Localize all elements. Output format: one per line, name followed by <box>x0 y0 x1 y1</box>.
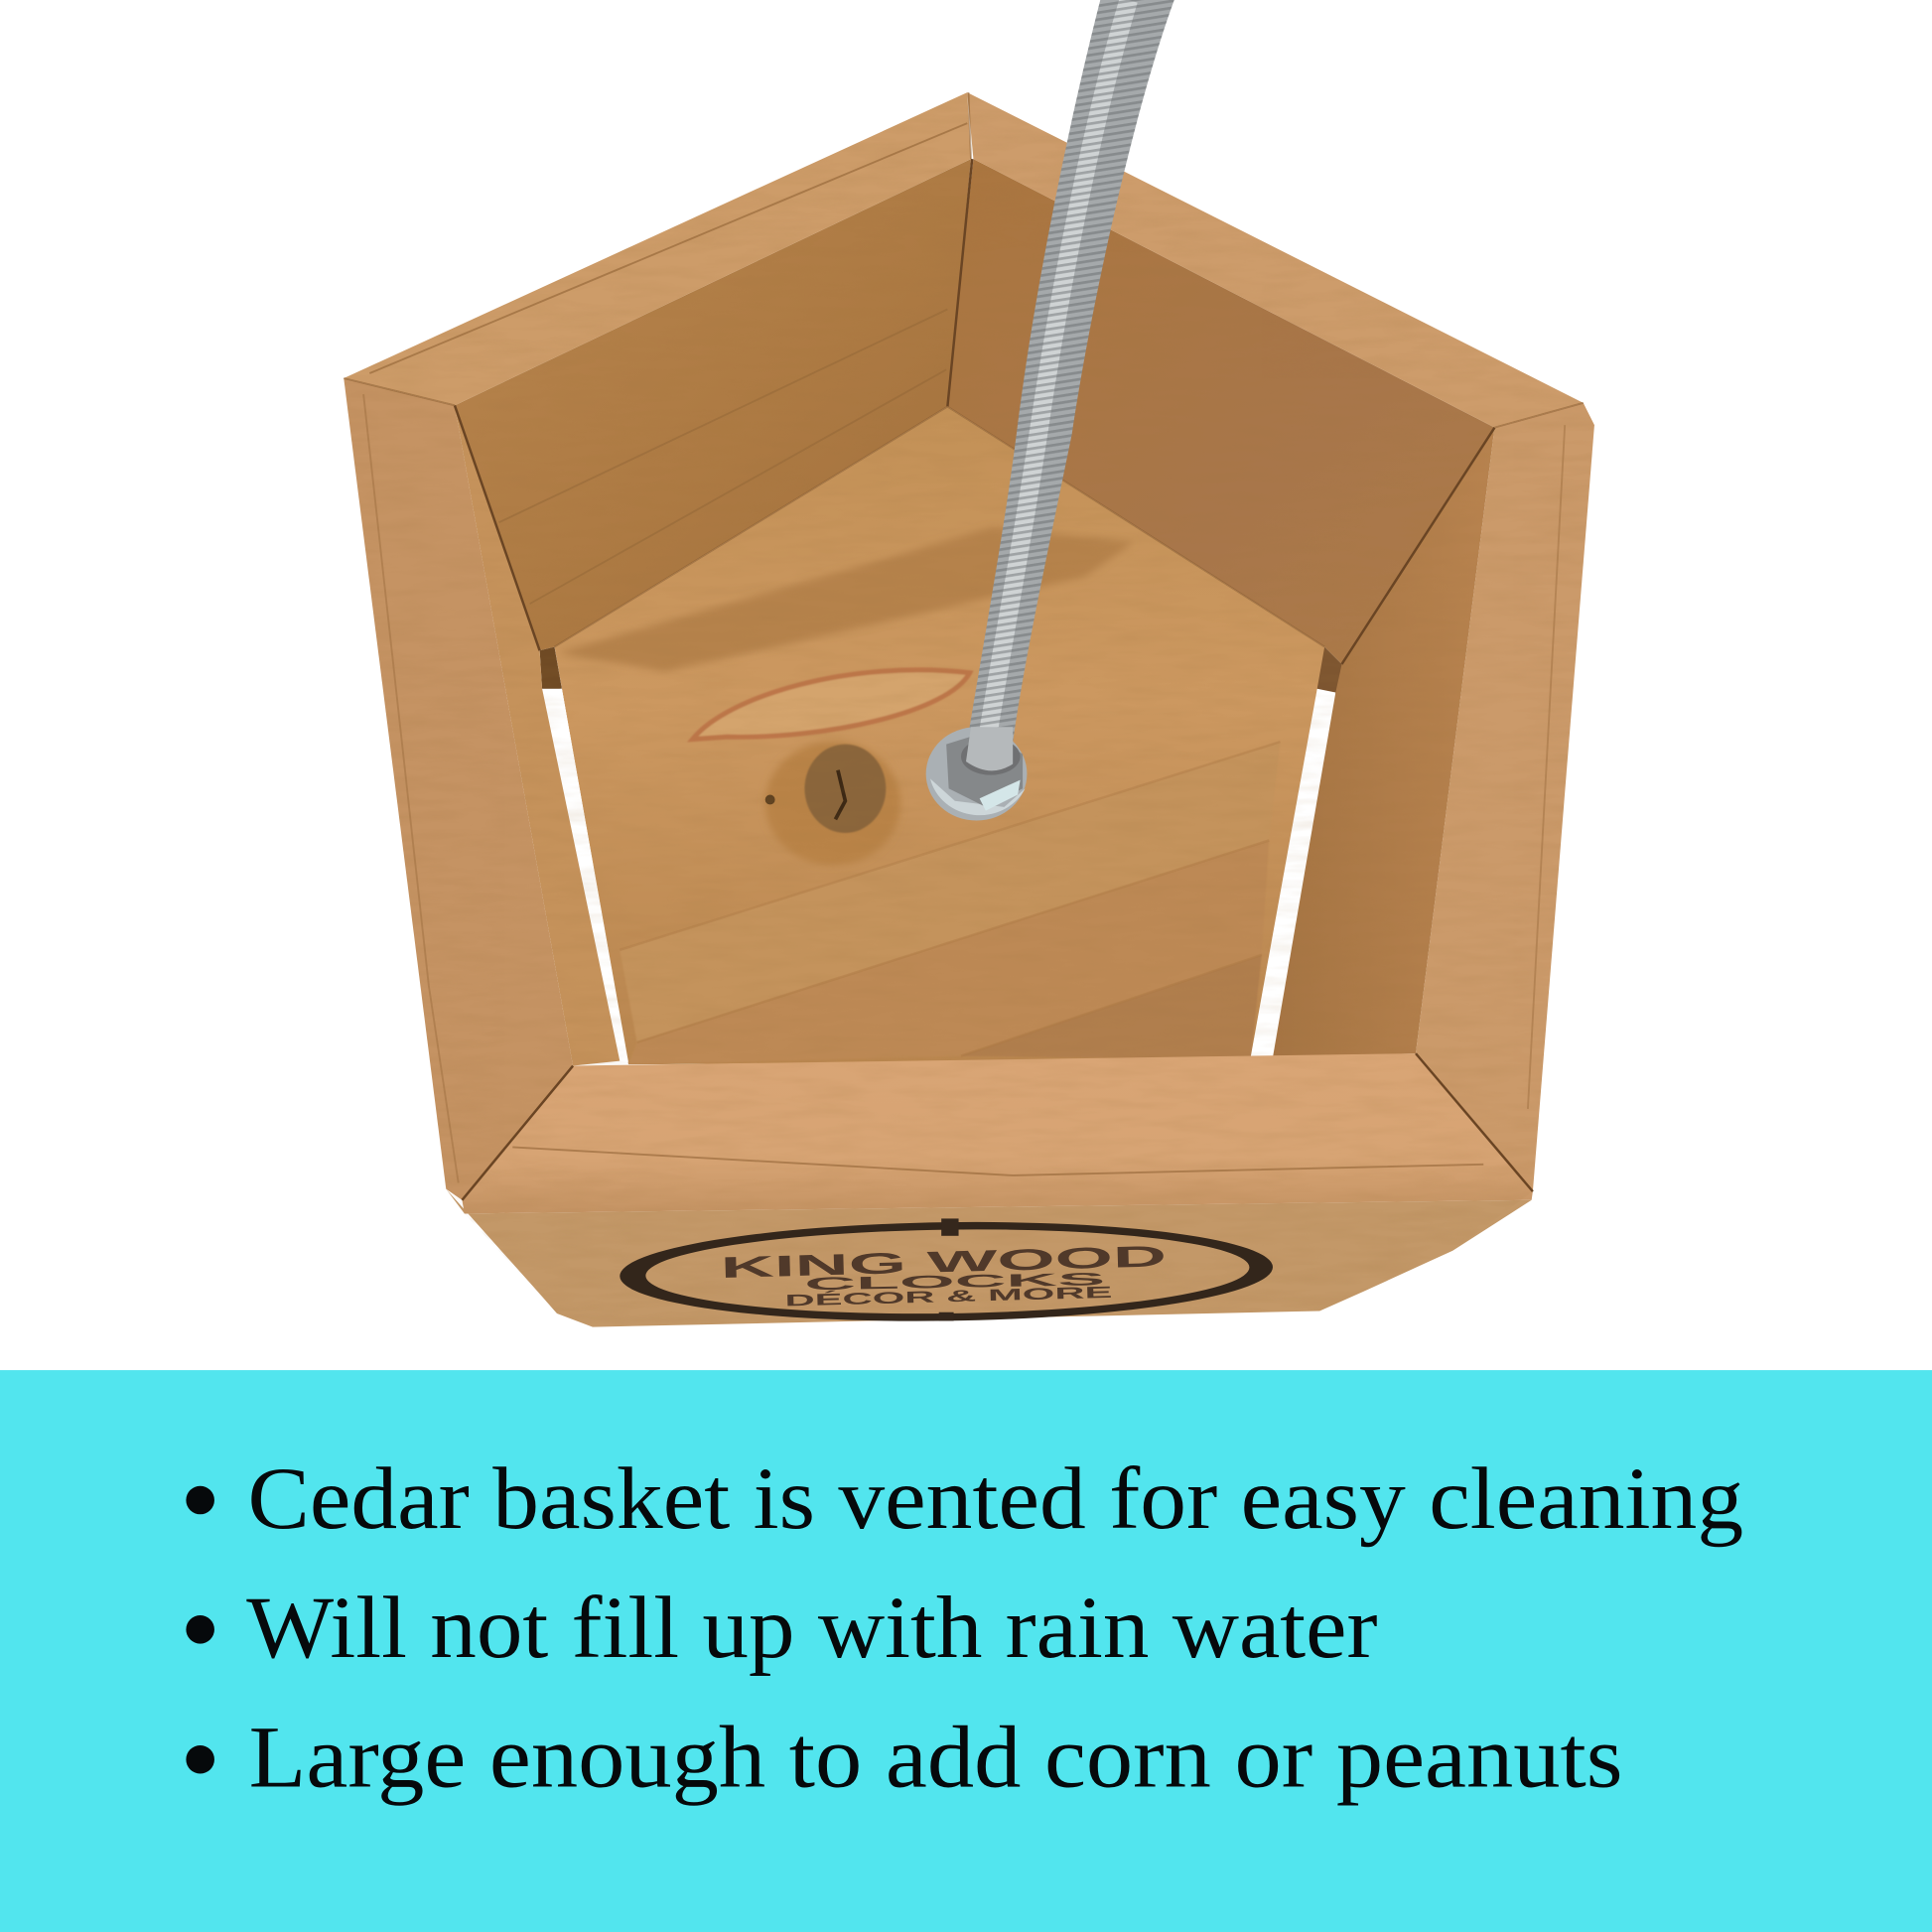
bullet: rain water: Will not fill up with rain water <box>246 1579 1378 1677</box>
left rim top <box>344 378 573 1200</box>
logo text <box>720 1239 1167 1310</box>
bottom rim <box>462 1053 1533 1213</box>
right inner face <box>1273 428 1494 1057</box>
threaded rod <box>964 0 1174 763</box>
basket front face <box>446 1189 1532 1327</box>
right rim <box>1416 403 1594 1191</box>
photo: cedar basket feeder <box>333 0 1601 1330</box>
bullet: vented basket: Cedar basket is vented for easy cleaning <box>247 1449 1743 1548</box>
wood grain overlay <box>455 153 1334 1309</box>
logo text: KING WOOD <box>720 1239 1167 1285</box>
wall corner shadow <box>540 647 562 689</box>
burned logo <box>620 1218 1274 1325</box>
logo text: CLOCKS <box>804 1270 1105 1295</box>
rim joints and shadow lines <box>455 159 1533 1200</box>
left rim inner face <box>455 405 620 1066</box>
basket floor <box>554 407 1335 1064</box>
panel: cyan feature band <box>0 1370 1932 1932</box>
top left rim <box>344 92 971 405</box>
bullet list <box>186 1449 1743 1807</box>
top right rim <box>967 92 1584 428</box>
inner left wall <box>455 159 971 650</box>
inner right wall <box>947 159 1494 664</box>
logo text: DÉCOR & MORE <box>784 1283 1113 1310</box>
washer and nut <box>926 727 1027 821</box>
bullet: corn or peanuts: Large enough to add corn or peanuts <box>249 1709 1622 1807</box>
right vent slit <box>1251 689 1335 1057</box>
left vent slit <box>548 689 628 1062</box>
wood knot and ring <box>692 670 970 865</box>
